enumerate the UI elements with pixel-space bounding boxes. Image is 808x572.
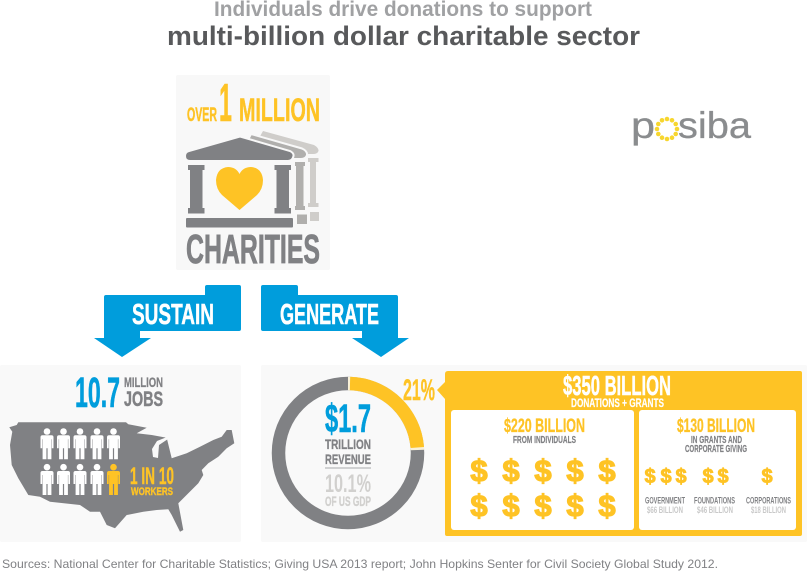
stat: 1.7 trillion revenue: REVENUE — [325, 451, 371, 467]
icon: small dollar signs: $ — [644, 466, 656, 488]
panel: donations and grants — [437, 370, 802, 536]
arrow: generate: GENERATE — [280, 299, 379, 331]
icon: ten dollar signs: $ — [598, 488, 616, 523]
logo: posiba — [631, 105, 751, 146]
icon: small dollar signs: $ — [761, 466, 773, 488]
stat: 1.7 trillion revenue: $1.7 — [325, 397, 371, 441]
panel: charities — [176, 73, 330, 272]
map: United States — [9, 422, 234, 532]
lake michigan — [152, 437, 168, 458]
heading: over 1 million — [187, 73, 320, 133]
panel: from individuals — [451, 410, 634, 530]
panel: from individuals: $220 BILLION — [504, 416, 585, 437]
stat: 1 in 10 workers — [130, 463, 174, 498]
icon: ten dollar signs: $ — [470, 488, 488, 523]
title: multi-billion dollar charitable sector — [167, 21, 641, 51]
stat: 10.7 million jobs: MILLION — [124, 374, 163, 390]
panel: revenue — [261, 365, 807, 542]
icon: small dollar signs: $ — [660, 466, 672, 488]
icon: ten dollar signs: $ — [534, 453, 552, 488]
icon: ten dollar signs: $ — [534, 488, 552, 523]
sources note: Sources: National Center for Charitable Statistics; Giving USA 2013 report; John Hopkins Senter for Civil Society Global Study 2012. — [2, 557, 718, 571]
panel: grants and corporate giving: CORPORATE GIVING — [685, 443, 747, 455]
icon: small dollar signs: $ — [717, 466, 729, 488]
icon: ten dollar signs: $ — [502, 453, 520, 488]
labels: giving sources: $66 BILLION — [647, 505, 683, 515]
icon: ten dollar signs: $ — [470, 453, 488, 488]
logo: posiba: p — [631, 105, 655, 146]
stat: 1.7 trillion revenue: OF US GDP — [325, 493, 371, 509]
stat: 10.7 million jobs: JOBS — [124, 388, 163, 411]
icon: heart — [216, 167, 263, 210]
panel: grants and corporate giving: IN GRANTS AND — [691, 434, 742, 446]
stat: 1 in 10 workers: 1 IN 10 — [130, 463, 174, 490]
labels: giving sources: $18 BILLION — [751, 505, 786, 515]
icon: small dollar signs: $ — [702, 466, 714, 488]
icon: ten dollar signs: $ — [566, 453, 584, 488]
heading: over 1 million: MILLION — [239, 92, 320, 128]
stat: 1 in 10 workers: WORKERS — [131, 486, 173, 498]
icon: ten dollar signs: $ — [566, 488, 584, 523]
arrow: generate — [261, 285, 409, 357]
icon: ten dollar signs — [470, 453, 616, 523]
stat: 21 percent: 21% — [403, 374, 435, 407]
title — [167, 0, 641, 51]
labels: giving sources — [645, 496, 791, 515]
stat: 1.7 trillion revenue — [325, 397, 371, 509]
arrow: sustain — [94, 285, 241, 357]
icon: ten dollar signs: $ — [598, 453, 616, 488]
labels: giving sources: GOVERNMENT — [645, 496, 685, 506]
heading: over 1 million: OVER — [187, 105, 217, 126]
subheading: donations + grants: DONATIONS + GRANTS — [571, 396, 664, 410]
icon: ten dollar signs: $ — [502, 488, 520, 523]
icon: small dollar signs — [644, 466, 773, 488]
stat: 10.7 million jobs: 10.7 — [75, 369, 120, 417]
donut chart — [278, 383, 418, 522]
stat: 1.7 trillion revenue: 10.1% — [325, 470, 371, 498]
stat: 1.7 trillion revenue: TRILLION — [325, 436, 371, 452]
heading: charities: CHARITIES — [186, 226, 320, 272]
logo: posiba: siba — [678, 105, 751, 146]
icon: temple with heart — [185, 131, 319, 228]
labels: giving sources: $46 BILLION — [697, 505, 733, 515]
heading: over 1 million: 1 — [219, 73, 232, 133]
icon: ten workers — [40, 428, 120, 495]
heading: 350 billion: $350 BILLION — [563, 370, 671, 401]
panel: from individuals: FROM INDIVIDUALS — [513, 434, 576, 446]
panel: grants and corporate giving — [639, 410, 796, 530]
panel: grants and corporate giving: $130 BILLION — [677, 416, 755, 437]
panel: jobs — [0, 365, 241, 542]
arrow: sustain: SUSTAIN — [132, 299, 214, 331]
icon: small dollar signs: $ — [675, 466, 687, 488]
labels: giving sources: FOUNDATIONS — [694, 496, 735, 506]
